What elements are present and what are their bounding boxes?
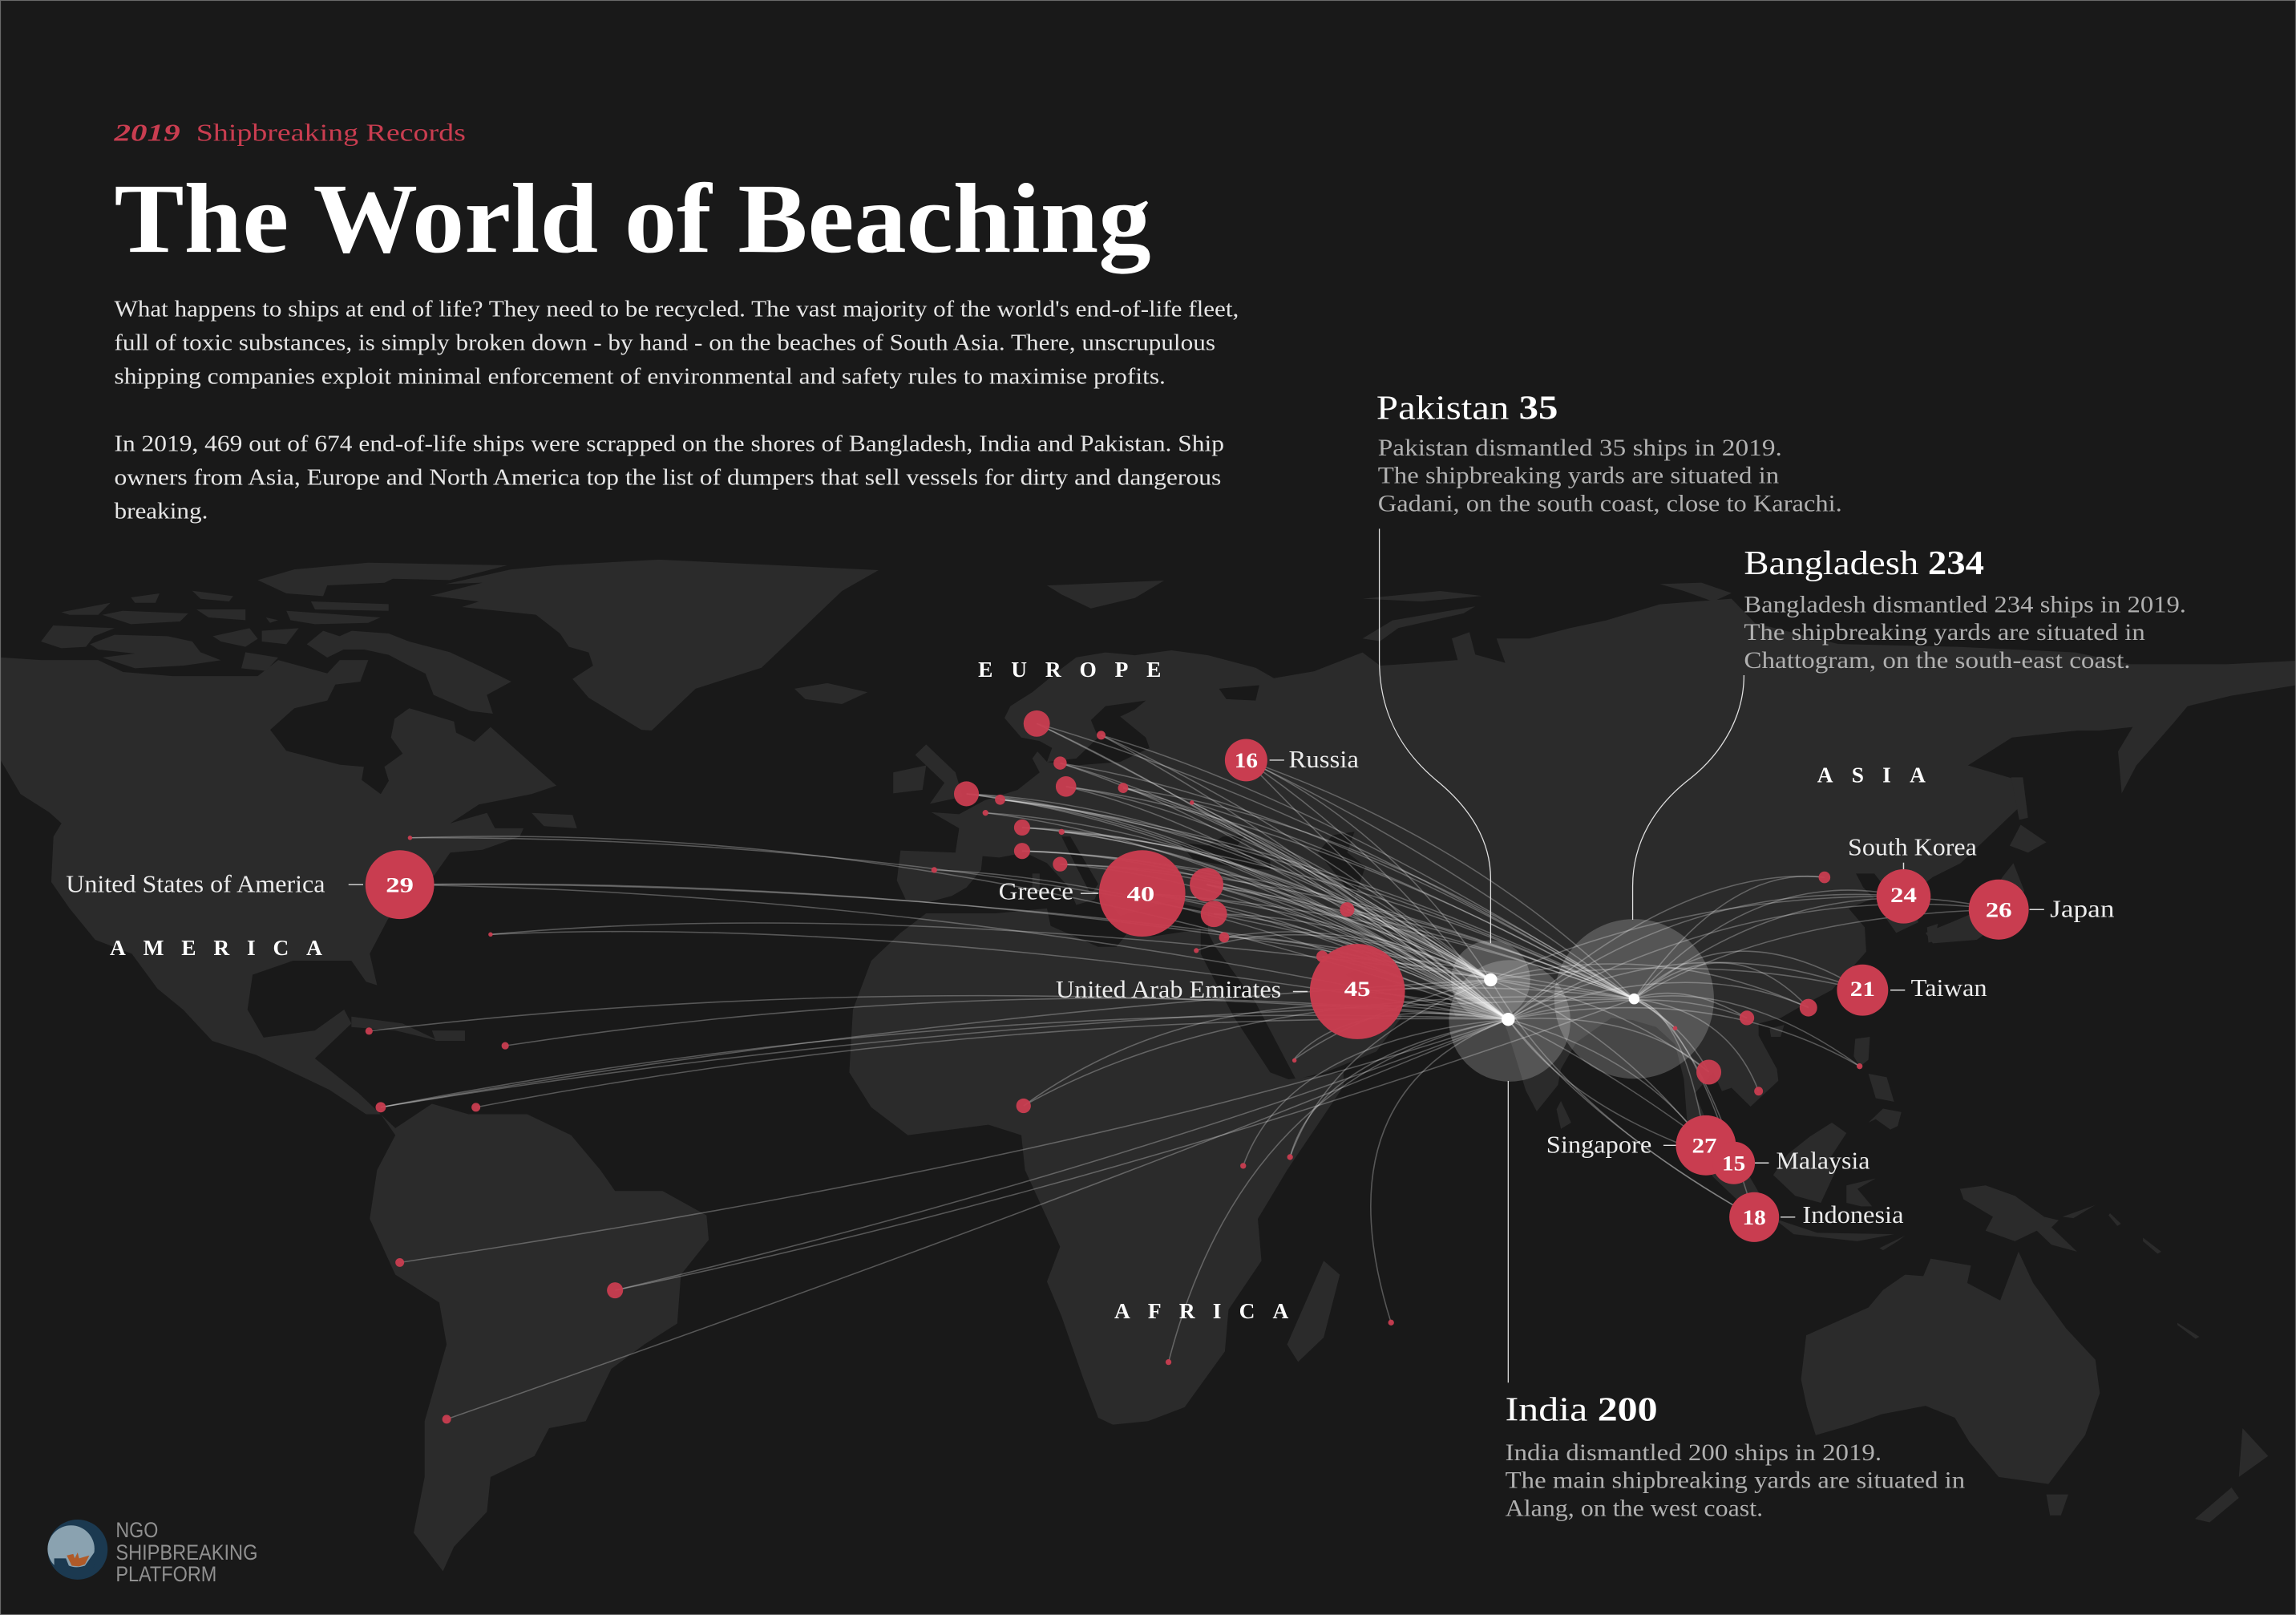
callout: India: India 200 xyxy=(1506,1392,1658,1429)
callout: Pakistan: Pakistan dismantled 35 ships in 2019. xyxy=(1378,435,1782,461)
intro paragraph 1: shipping companies exploit minimal enforcement of environmental and safety rules to maximise profits. xyxy=(114,365,1166,390)
bubble: Russia 16: 16 xyxy=(1235,748,1258,772)
intro paragraph 1: What happens to ships at end of life? They need to be recycled. The vast majority of the world's end-of-life fleet, xyxy=(114,298,1239,322)
intro paragraph 1 xyxy=(114,298,1239,390)
bubble: South Korea 24 xyxy=(1877,869,1930,924)
Southeast Asia and Pacific islands xyxy=(1557,1025,2199,1339)
Madagascar xyxy=(1287,1261,1340,1362)
connector: India xyxy=(1507,1081,1509,1382)
logo icon xyxy=(47,1520,107,1580)
callout: Bangladesh: Bangladesh 234 xyxy=(1744,545,1984,582)
Iceland xyxy=(794,683,867,704)
world map xyxy=(0,560,2296,1571)
bubble: Greece 40: 40 xyxy=(1127,881,1154,905)
bubble: United Arab Emirates 45 xyxy=(1310,944,1405,1039)
eyebrow: Shipbreaking Records xyxy=(196,119,466,146)
bubble: Indonesia 18: 18 xyxy=(1743,1205,1766,1229)
region label: Asia: ASIA xyxy=(1817,763,1926,787)
bubble: Singapore 27 xyxy=(1676,1115,1736,1176)
connector: Pakistan xyxy=(1380,528,1490,943)
callout: Pakistan: The shipbreaking yards are situated in xyxy=(1378,463,1780,489)
Mediterranean islands xyxy=(1033,873,1040,891)
country labels: Indonesia xyxy=(1802,1201,1903,1228)
country labels: United Arab Emirates xyxy=(1056,976,1281,1003)
bubble: United States of America 29 xyxy=(366,850,435,919)
Eurasia xyxy=(897,599,2296,1167)
country labels: Russia xyxy=(1288,746,1359,773)
bubble: United States of America 29: 29 xyxy=(386,872,414,897)
country labels: Japan xyxy=(2050,895,2114,922)
minor flag state dots xyxy=(366,710,1862,1423)
Japan and Sakhalin xyxy=(1926,777,2047,943)
Arctic Eurasia islands xyxy=(1047,581,1732,642)
Africa xyxy=(849,909,1344,1425)
title: The World of Beaching xyxy=(114,163,1151,274)
connector: Bangladesh xyxy=(1633,675,1744,920)
callout: Pakistan: Pakistan 35 xyxy=(1376,390,1558,427)
bubble: South Korea 24: 24 xyxy=(1890,883,1917,907)
bubble: Indonesia 18 xyxy=(1729,1192,1779,1242)
shipbreaking hub halos xyxy=(1449,919,1714,1082)
intro paragraph 2: breaking. xyxy=(114,500,208,524)
intro paragraph 2: In 2019, 469 out of 674 end-of-life ships were scrapped on the shores of Bangladesh, India and Pakistan. Ship xyxy=(114,432,1224,457)
flow lines from flag states to hubs xyxy=(369,723,1999,1419)
bubble: United Arab Emirates 45: 45 xyxy=(1344,977,1371,1001)
Britain and Ireland xyxy=(893,744,963,803)
logo wordmark: NGO xyxy=(115,1518,158,1542)
country labels: United States of America xyxy=(66,870,325,897)
country labels xyxy=(66,746,2114,1228)
dash ticks for country labels xyxy=(349,760,2044,1217)
country labels: Malaysia xyxy=(1777,1148,1870,1175)
bubble: Taiwan 21: 21 xyxy=(1850,977,1875,1001)
intro paragraph 2 xyxy=(114,432,1224,524)
intro paragraph 2: owners from Asia, Europe and North America top the list of dumpers that sell vessels for dirty and dangerous xyxy=(114,466,1221,491)
country labels: Greece xyxy=(999,877,1073,905)
callout: Pakistan xyxy=(1376,390,1842,516)
region label: Europe: EUROPE xyxy=(978,658,1161,682)
hub points xyxy=(1484,973,1639,1026)
country labels: South Korea xyxy=(1848,834,1977,861)
South America xyxy=(370,1103,709,1571)
Greenland xyxy=(430,560,879,731)
logo: NGO Shipbreaking Platform xyxy=(47,1518,257,1586)
North America xyxy=(0,658,556,1115)
callout: Pakistan: Gadani, on the south coast, close to Karachi. xyxy=(1378,491,1842,516)
Caribbean and Newfoundland xyxy=(351,813,577,1041)
bubble: Taiwan 21 xyxy=(1837,965,1888,1016)
Arctic Canada xyxy=(41,563,511,714)
callout: India: The main shipbreaking yards are situated in xyxy=(1506,1468,1966,1494)
region label: Africa: AFRICA xyxy=(1114,1299,1289,1323)
callout: Bangladesh: Chattogram, on the south-east coast. xyxy=(1744,648,2131,674)
logo wordmark xyxy=(115,1518,257,1586)
callout: Bangladesh: Bangladesh dismantled 234 ships in 2019. xyxy=(1744,592,2186,617)
intro paragraph 1: full of toxic substances, is simply broken down - by hand - on the beaches of South Asia. There, unscrupulous xyxy=(114,331,1215,356)
logo wordmark: SHIPBREAKING xyxy=(115,1540,257,1564)
inland seas xyxy=(1047,685,1365,898)
callout: Bangladesh: The shipbreaking yards are situated in xyxy=(1744,620,2145,646)
bubble: Greece 40 xyxy=(1099,850,1186,937)
callout: India: Alang, on the west coast. xyxy=(1506,1496,1763,1521)
eyebrow: 2019 xyxy=(113,119,180,146)
country labels: Singapore xyxy=(1546,1131,1651,1158)
bubble: Malaysia 15 xyxy=(1712,1142,1755,1184)
region label: America: AMERICA xyxy=(110,936,322,960)
country labels: Taiwan xyxy=(1911,974,1987,1002)
bubble: Japan 26: 26 xyxy=(1986,897,2012,921)
bubble: Malaysia 15: 15 xyxy=(1722,1151,1745,1175)
callout: Bangladesh xyxy=(1744,545,2186,674)
callout: India: India dismantled 200 ships in 2019. xyxy=(1506,1440,1882,1466)
Australia and New Zealand xyxy=(1801,1252,2268,1522)
bubble: Japan 26 xyxy=(1969,880,2029,940)
callout: India xyxy=(1506,1392,1966,1521)
bubble: Singapore 27: 27 xyxy=(1692,1133,1717,1157)
eyebrow xyxy=(113,119,466,146)
bubble: Russia 16 xyxy=(1225,739,1267,781)
logo wordmark: PLATFORM xyxy=(115,1562,216,1586)
